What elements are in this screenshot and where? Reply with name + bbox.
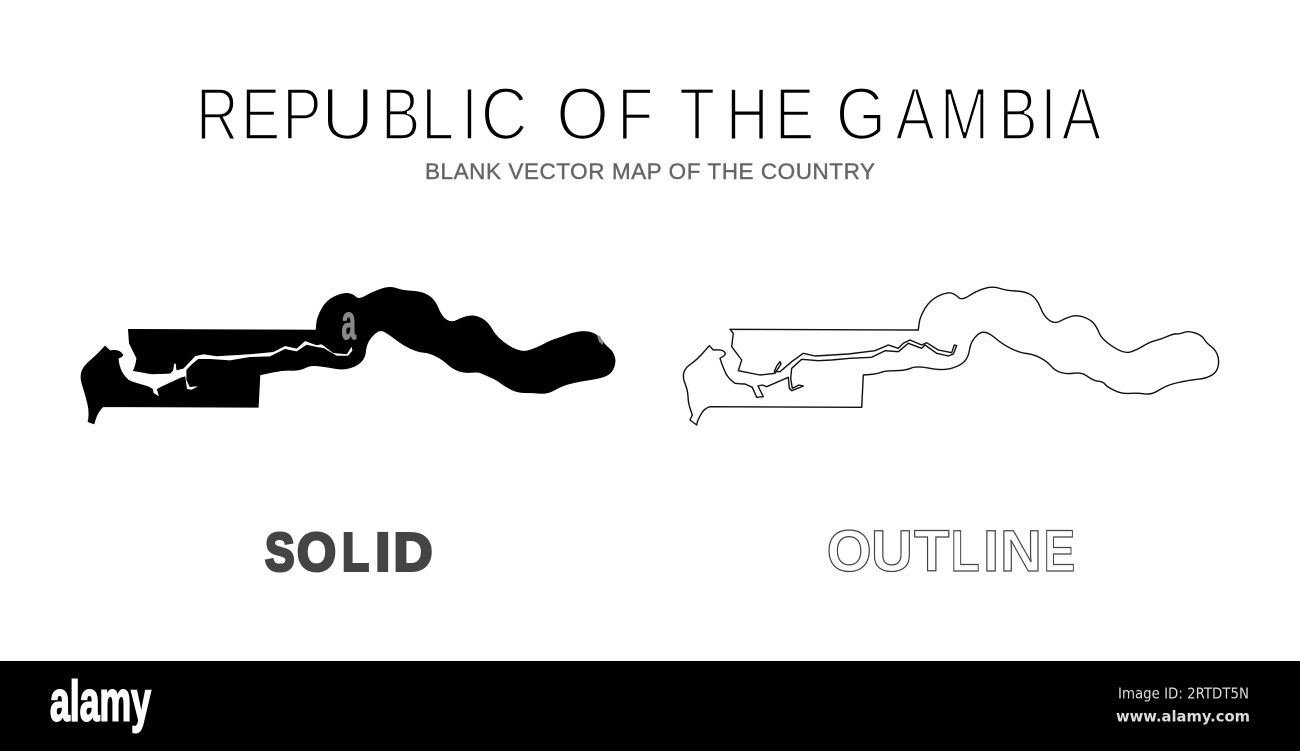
solid map of the Gambia bbox=[81, 287, 615, 424]
title: C bbox=[481, 73, 528, 155]
label: solid: L bbox=[342, 522, 369, 583]
title bbox=[196, 72, 1101, 156]
label: outline: E bbox=[1044, 520, 1075, 584]
title: U bbox=[321, 72, 374, 155]
title: G bbox=[836, 73, 886, 155]
country silhouette bbox=[81, 287, 615, 424]
label: solid: ID bbox=[375, 522, 432, 582]
label: solid bbox=[265, 522, 432, 583]
subtitle: BLANK VECTOR MAP OF THE COUNTRY bbox=[425, 159, 875, 184]
website: www.alamy.com bbox=[1116, 708, 1250, 726]
label: solid: S bbox=[265, 522, 295, 583]
title: O bbox=[556, 74, 609, 156]
title: REP bbox=[196, 73, 322, 156]
label: outline: OUT bbox=[827, 519, 949, 584]
footer bar bbox=[0, 661, 1300, 751]
label: outline bbox=[827, 519, 1075, 584]
logo: alamy bbox=[50, 670, 151, 734]
title: AMBIA bbox=[895, 73, 1101, 156]
image id: Image ID: 2RTDT5N bbox=[1118, 684, 1249, 702]
title: BLI bbox=[381, 73, 478, 156]
title: F THE bbox=[617, 73, 814, 156]
label: solid: O bbox=[297, 523, 336, 583]
label: outline: L bbox=[951, 520, 980, 584]
grey watermark fragment bbox=[597, 335, 603, 345]
label: outline: IN bbox=[983, 519, 1042, 584]
outline map of the Gambia bbox=[683, 287, 1219, 425]
watermark letter: a bbox=[342, 296, 356, 350]
